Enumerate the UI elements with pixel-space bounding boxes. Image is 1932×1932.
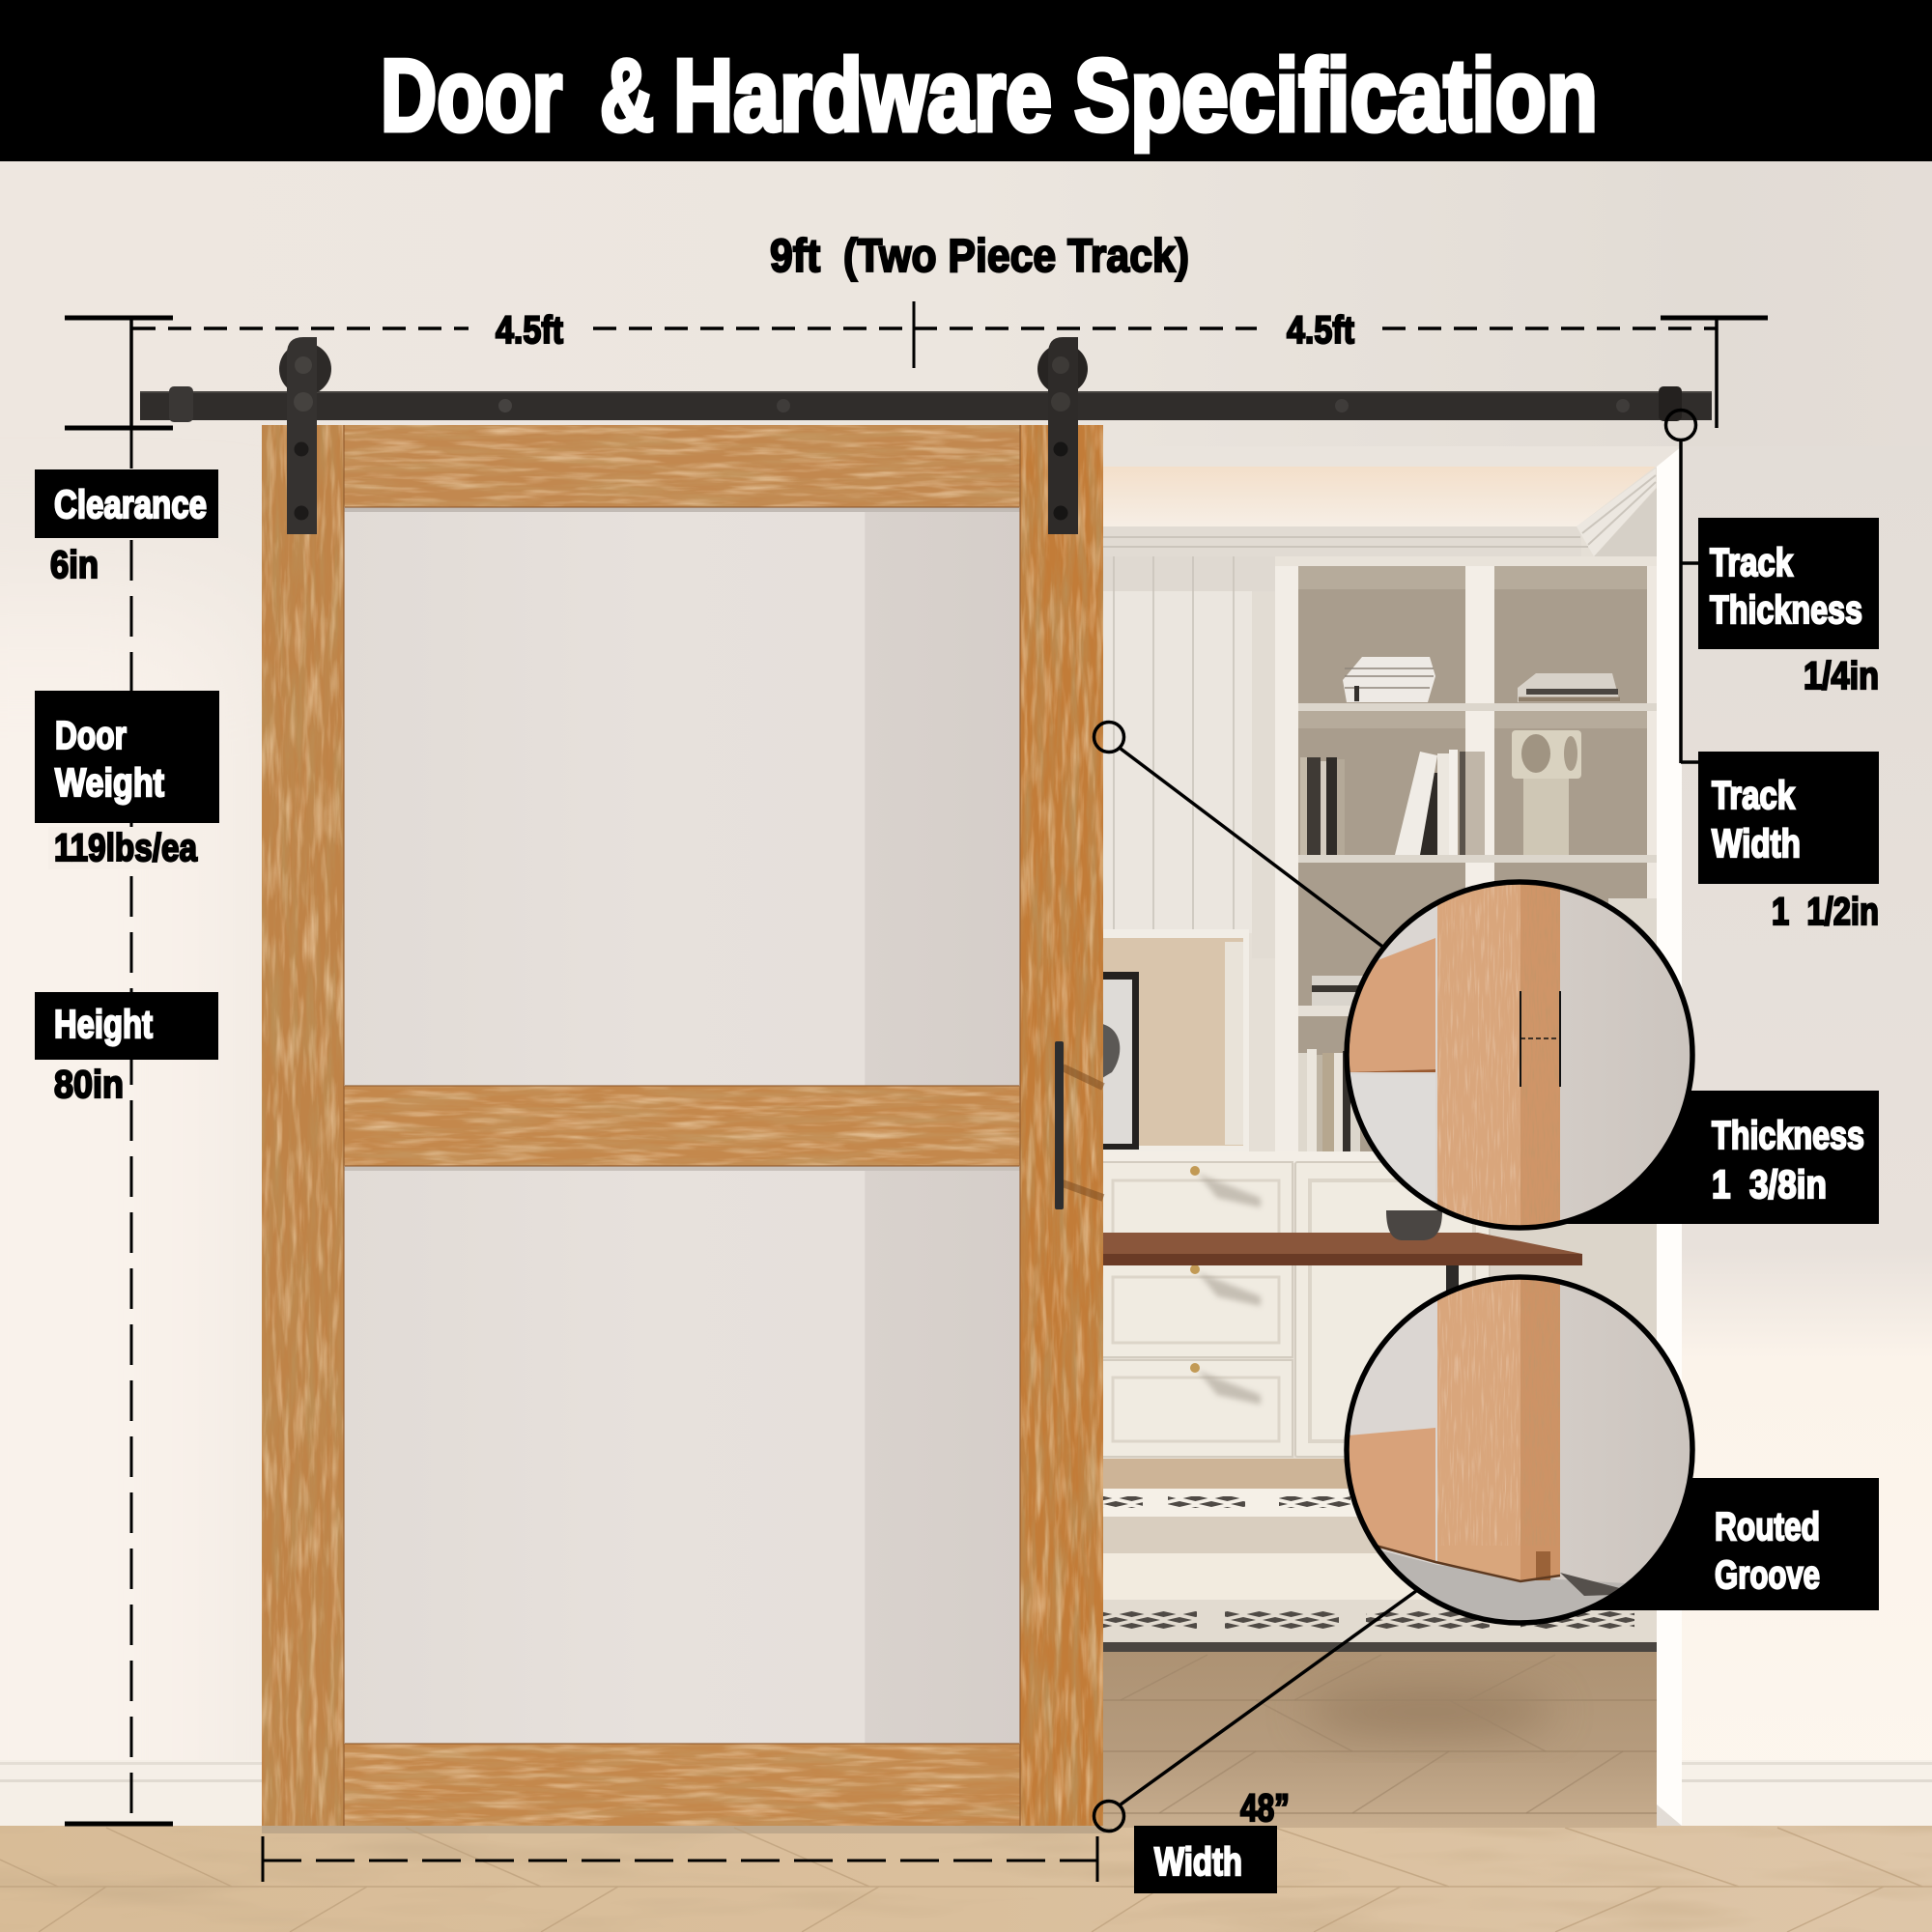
callout: track thickness: [1698, 518, 1879, 697]
room seen through the opening: [1102, 446, 1682, 1828]
callout: door weight: Weight: [55, 760, 164, 805]
stile face and edge with groove: [1437, 1275, 1560, 1581]
leader to thickness detail: [1094, 723, 1385, 949]
left hanger: [279, 337, 331, 534]
callout: routed groove label: [1520, 1478, 1879, 1610]
callout: clearance: [35, 469, 218, 586]
callout: clearance: Clearance: [54, 482, 207, 526]
callout: track thickness: 1/4in: [1804, 655, 1879, 697]
callout: thickness label: [1520, 1091, 1879, 1224]
detail circle: routed groove: [1343, 1275, 1700, 1633]
bookshelf: [1275, 556, 1657, 1165]
callout: door width: Width: [1154, 1839, 1242, 1884]
track dimension lines: [65, 301, 1768, 1824]
label: right section 4.5ft: 4.5ft: [1287, 309, 1354, 352]
title: [381, 39, 1598, 153]
track stop right: [1659, 386, 1682, 421]
desk and bowl: [1102, 1210, 1582, 1312]
callout: door width: 48”: [1240, 1787, 1290, 1830]
left stile: [262, 425, 344, 1826]
callout: door weight: [35, 691, 219, 869]
door jamb: [1657, 446, 1682, 1826]
top rail: [344, 425, 1020, 507]
stile edge close-up: [1520, 879, 1560, 1236]
right stile: [1020, 425, 1103, 1826]
title: Door: [381, 39, 562, 153]
door width dimension line: [263, 1836, 1097, 1882]
shiplap wall: [1103, 556, 1275, 958]
callout: track width: Width: [1712, 821, 1801, 866]
books and sculpture: [1298, 657, 1657, 1151]
callout: door weight: Door: [55, 713, 127, 757]
framed art: [1102, 929, 1249, 1151]
detail circle: door thickness: [1343, 879, 1700, 1236]
label: left section 4.5ft: 4.5ft: [496, 309, 563, 352]
leader lines: track callouts: [1665, 410, 1698, 763]
bottom rail close-up: [1348, 1428, 1435, 1562]
callout: track thickness: Track: [1710, 540, 1793, 584]
middle rail: [344, 1086, 1020, 1166]
callout: height: 80in: [54, 1064, 124, 1106]
callout: height: [35, 992, 218, 1106]
title: Hardware: [673, 39, 1052, 153]
cove light: [1103, 467, 1656, 526]
callout: routed groove label: Routed: [1715, 1504, 1820, 1548]
crown moulding: [1103, 469, 1657, 566]
callout: thickness label: 1 3/8in: [1712, 1162, 1827, 1207]
callout: track thickness: Thickness: [1710, 587, 1862, 632]
title: Specification: [1074, 39, 1598, 153]
barn door track: [140, 386, 1712, 422]
glass panels: [344, 507, 1020, 1746]
lower wood floor: [0, 1824, 1932, 1932]
callout: routed groove label: Groove: [1715, 1552, 1820, 1597]
title: &: [600, 39, 654, 153]
floor and rug in the room: [1102, 1459, 1657, 1828]
thickness marks: [1520, 991, 1560, 1087]
cabinets: [1102, 1151, 1657, 1492]
right hanger: [1037, 337, 1088, 534]
callout: track width: 1 1/2in: [1772, 891, 1879, 933]
track total length label: 9ft (Two Piece Track): [770, 231, 1189, 282]
track stop left: [169, 386, 193, 422]
callout: track width: Track: [1712, 773, 1795, 817]
callout: thickness label: Thickness: [1712, 1113, 1864, 1157]
title banner: [0, 0, 1932, 161]
callout: clearance: 6in: [50, 544, 99, 586]
callout: track width: [1698, 752, 1879, 933]
soffit above the opening: [1103, 446, 1681, 468]
callout: door width: [1134, 1787, 1290, 1893]
bottom rail: [344, 1744, 1020, 1826]
mid rail close-up: [1349, 938, 1435, 1072]
callout: height: Height: [54, 1002, 153, 1046]
callout: door weight: 119lbs/ea: [54, 827, 198, 869]
stile face close-up: [1437, 879, 1520, 1236]
door pull handle: [1055, 1041, 1103, 1209]
leader to groove detail: [1094, 1591, 1416, 1832]
baseboards: [0, 1760, 1932, 1828]
sliding door: [262, 425, 1103, 1826]
